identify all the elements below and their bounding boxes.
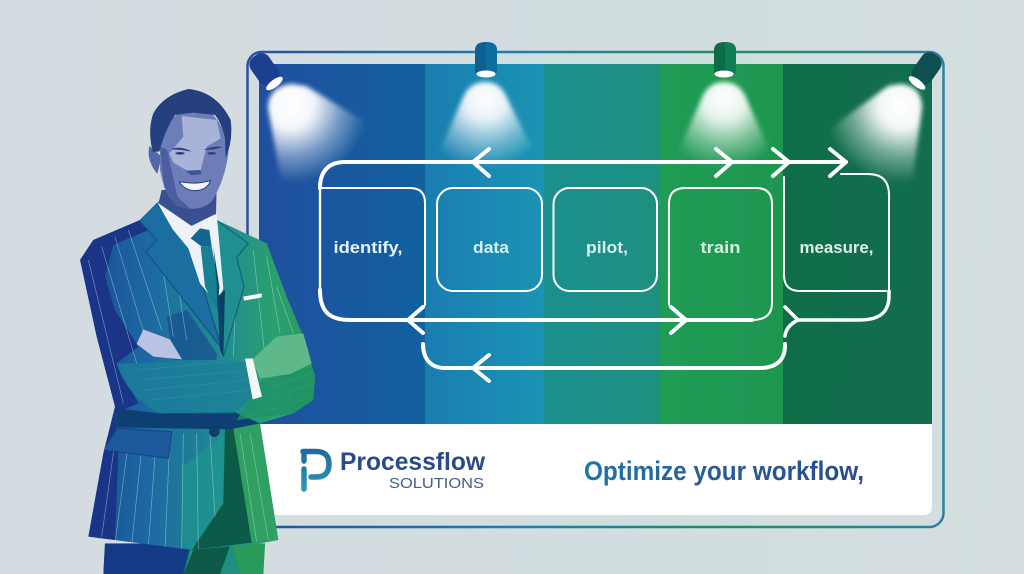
lower left arrow line <box>320 290 752 320</box>
neck <box>159 187 217 225</box>
sleeve and shoulder shadows <box>80 220 148 540</box>
right front panel <box>234 424 278 542</box>
face <box>160 108 228 209</box>
lower arrowheads <box>408 307 686 333</box>
eyes and brows <box>171 147 223 155</box>
top arrow line <box>320 162 846 188</box>
figure: businessman <box>77 89 320 574</box>
mouth <box>179 181 211 191</box>
brand subtitle: SOLUTIONS <box>389 476 484 492</box>
face highlights <box>169 116 221 170</box>
brand name: Processflow <box>340 448 486 476</box>
shirt cuff <box>245 358 262 399</box>
chest fold shadow <box>167 310 217 360</box>
spotlight beam 4 <box>828 84 922 185</box>
right sleeve <box>237 367 313 420</box>
waist shadow <box>115 408 260 429</box>
shirt and collar <box>157 203 223 303</box>
box: identify <box>320 188 425 305</box>
tie <box>191 228 219 312</box>
trousers <box>103 543 265 574</box>
right chevron <box>785 307 798 336</box>
box: data <box>437 188 542 291</box>
spotlight beam 2 <box>432 82 542 168</box>
step label: identify: identify, <box>334 238 402 257</box>
box: train <box>669 188 772 320</box>
tagline: Optimize your workflow, <box>584 456 864 486</box>
panel: white brand footer <box>259 424 932 515</box>
pocket flap <box>103 428 172 458</box>
box: pilot <box>554 188 657 291</box>
spotlight beam 1 <box>268 84 375 185</box>
infographic canvas <box>80 42 945 574</box>
logo mark <box>303 452 329 489</box>
panel: coloured process bands <box>259 64 932 424</box>
face shadow <box>160 147 192 210</box>
step label: measure: measure, <box>800 238 874 257</box>
box: measure <box>784 174 889 291</box>
ear <box>149 146 162 174</box>
process loop arrows <box>320 149 889 381</box>
jacket <box>77 200 320 553</box>
outer frame <box>248 52 944 527</box>
step label: pilot: pilot, <box>586 238 628 257</box>
spotlight lamp 2 <box>475 42 497 78</box>
top arrowheads <box>473 149 846 176</box>
spotlight lamp 4 <box>907 49 945 92</box>
crossed forearm <box>117 360 253 413</box>
left side of loop <box>319 188 321 290</box>
lower teal shade <box>182 437 223 550</box>
jacket button <box>209 426 220 437</box>
nose <box>186 170 202 175</box>
right lapel <box>216 220 248 357</box>
spotlight lamp 3 <box>714 42 736 78</box>
hand: left <box>137 329 182 359</box>
hand: right <box>252 333 312 378</box>
measure loop return <box>798 291 889 320</box>
spotlight beam 3 <box>671 82 777 168</box>
lower jacket opening <box>192 428 252 550</box>
left lapel <box>139 203 222 348</box>
bottom arrowhead <box>473 355 489 381</box>
pocket square <box>243 293 262 301</box>
hair <box>150 89 231 158</box>
step label: train: train <box>700 238 740 257</box>
step label: data: data <box>473 238 510 257</box>
bottom return arrow <box>423 344 785 368</box>
pinstripes <box>88 230 315 550</box>
spotlight lamp 1 <box>246 50 285 93</box>
dark shirt-front shadow <box>217 290 225 357</box>
